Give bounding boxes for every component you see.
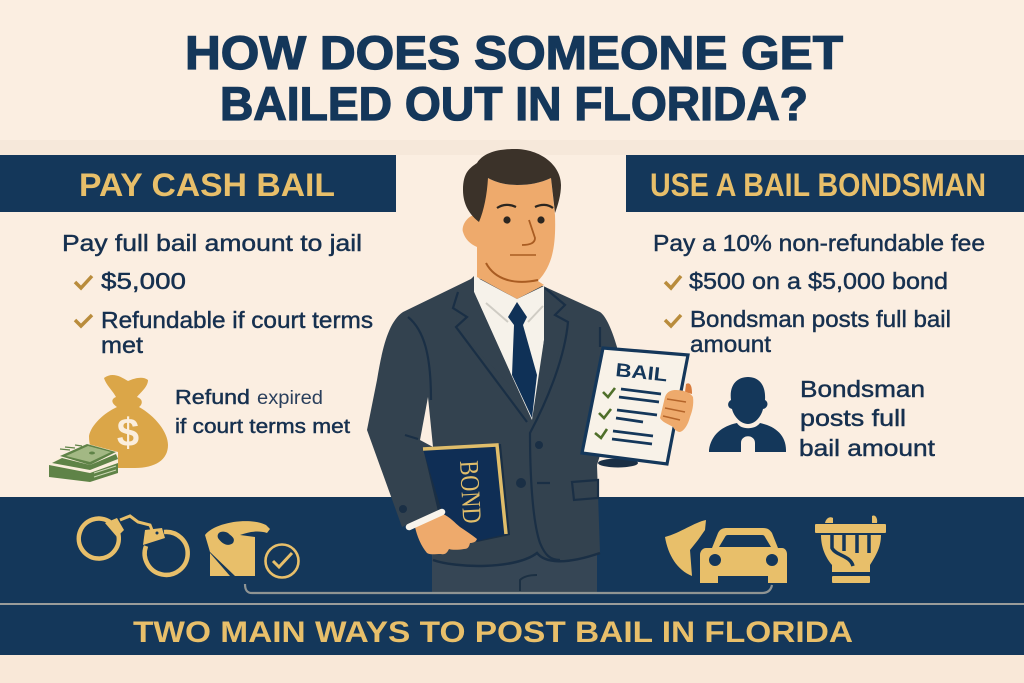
panel: left text list: $5,000 [101, 268, 186, 294]
under-arm gap [420, 397, 433, 447]
panel: use a bail bondsman header [626, 155, 1024, 212]
icon: bondsman silhouette [709, 377, 786, 452]
icon: money bag with cash [49, 375, 168, 482]
panel: bottom band [0, 497, 1024, 655]
checklist paper: BAIL [614, 360, 669, 386]
panel: left text list: met [101, 332, 144, 358]
neck and face [477, 178, 555, 299]
left hand [415, 514, 477, 554]
panel: pay cash bail header: PAY CASH BAIL [79, 167, 335, 203]
connector line [245, 584, 772, 593]
hair [463, 149, 561, 222]
illustration: man in suit [367, 149, 693, 592]
panel: left text list: Pay full bail amount to jail [62, 230, 362, 256]
panel: left text list: Refundable if court terms [101, 307, 373, 333]
icon: money bag with cash: $ [117, 411, 139, 455]
tie [508, 302, 537, 418]
shirt [474, 276, 544, 420]
text: bondsman note: posts full [800, 405, 906, 431]
title: HOW DOES SOMEONE GET [185, 26, 843, 79]
shirt cuff [409, 512, 442, 527]
panel: use a bail bondsman header: USE A BAIL BONDSMAN [650, 167, 986, 203]
panel: right text list: Pay a 10% non-refundable fee [653, 230, 985, 256]
text: refund note [175, 387, 350, 438]
lapel lines [453, 288, 568, 560]
paper shadow [598, 458, 638, 468]
icon: car [700, 528, 787, 583]
panel: right text list: $500 on a $5,000 bond [689, 268, 948, 294]
ear [463, 215, 479, 247]
jacket [367, 278, 617, 566]
book [423, 444, 510, 542]
book: BOND [454, 460, 487, 524]
icon: shield shape [665, 520, 706, 576]
footer heading: TWO MAIN WAYS TO POST BAIL IN FLORIDA [133, 616, 853, 649]
text: bondsman note: Bondsman [800, 376, 925, 402]
trousers [432, 550, 597, 592]
panel: right text list [653, 230, 985, 357]
right hand holding paper [660, 383, 693, 432]
panel: right text list: amount [690, 331, 772, 357]
panel: pay cash bail header [0, 155, 396, 212]
sleeve creases and pocket [405, 317, 600, 500]
buttons [535, 441, 543, 449]
text: bondsman note [799, 376, 936, 461]
title [185, 26, 843, 130]
icon: handcuffs [79, 516, 188, 575]
panel: right text list: Bondsman posts full bail [690, 306, 951, 332]
lapel fill [456, 276, 568, 405]
text: refund note: if court terms met [175, 416, 350, 438]
facial features [486, 205, 553, 282]
panel: left text list [62, 230, 373, 358]
icon: door hanger with check [205, 521, 298, 578]
text: refund note: expired [257, 388, 323, 409]
text: bondsman note: bail amount [799, 435, 936, 461]
title: BAILED OUT IN FLORIDA? [220, 77, 808, 130]
checklist paper [582, 348, 688, 464]
text: refund note: Refund [175, 387, 250, 409]
icon: basket [815, 515, 886, 583]
